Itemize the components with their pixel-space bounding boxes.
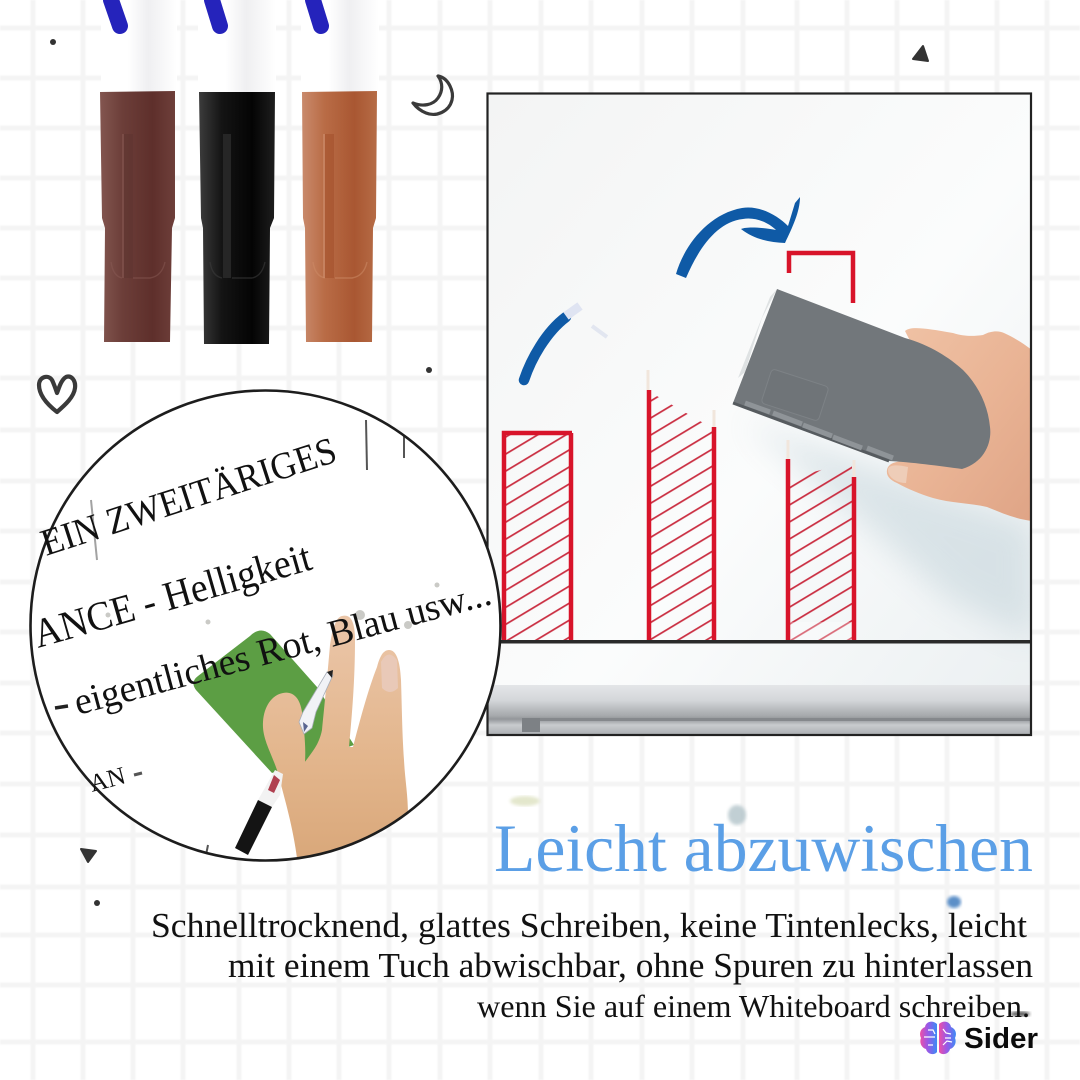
circular inset [28, 390, 500, 870]
hand holding eraser [887, 328, 1032, 521]
inset text: AN: AN [87, 762, 128, 798]
eraser shadow [770, 430, 1030, 634]
smudge marks [510, 796, 1030, 1016]
eraser [733, 289, 990, 469]
Sider logo [920, 1022, 1038, 1055]
pen: orange-brown [301, 0, 379, 342]
red bracket top of erased bar [789, 253, 853, 303]
axis line [487, 640, 1031, 644]
three marker pens [100, 0, 379, 344]
pen: black [198, 0, 276, 344]
smudges [106, 582, 440, 629]
bar 3 [788, 440, 854, 640]
description text [151, 906, 1033, 1024]
doodle: triangle bottom left [81, 849, 96, 862]
description text: Schnelltrocknend, glattes Schreiben, keine Tintenlecks, leicht [151, 906, 1027, 945]
doodle: dots [50, 39, 432, 906]
description text: mit einem Tuch abwischbar, ohne Spuren zu hinterlassen [228, 946, 1033, 985]
inset text: line 3: eigentliches Rot, Blau usw... [69, 572, 496, 724]
inset heading: line 1: EIN ZWEITÄRIGES [36, 429, 342, 565]
doodle: triangle top right [913, 46, 928, 61]
board tray [487, 685, 1031, 735]
hand with fingers [263, 616, 408, 870]
description text: wenn Sie auf einem Whiteboard schreiben. [477, 988, 1030, 1024]
doodle: heart [39, 377, 75, 412]
blue arrow [676, 197, 800, 278]
blue arc, partly erased [524, 306, 607, 380]
green eraser [193, 630, 354, 773]
bar 1 [504, 433, 572, 640]
inset text: line 2: ANCE - Helligkeit [28, 533, 317, 657]
logo wordmark: Sider [964, 1023, 1038, 1055]
stray ink marks [55, 420, 404, 860]
photo frame [488, 94, 1031, 735]
doodle: moon [413, 76, 452, 114]
thumbnail on thumb [888, 465, 908, 483]
heading: Leicht abzuwischen [494, 810, 1033, 886]
bar 2 [648, 370, 714, 640]
marker pen in hand [235, 670, 333, 855]
whiteboard photo panel [487, 93, 1035, 735]
icon: brain [920, 1022, 956, 1054]
pen: brown [100, 0, 177, 342]
